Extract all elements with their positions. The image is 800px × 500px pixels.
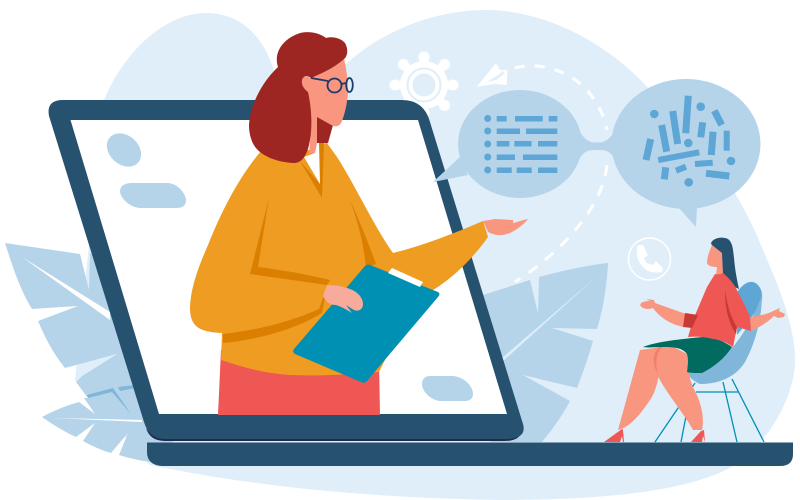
front leg [653, 345, 703, 430]
shoe: front [691, 430, 705, 442]
chair legs [655, 379, 764, 442]
leaf: left, behind laptop [5, 243, 175, 462]
character: teacher [190, 32, 528, 415]
shirt [688, 273, 751, 347]
skirt [218, 350, 380, 415]
speech bubble: scrambled [612, 79, 760, 227]
face [301, 55, 348, 153]
screen blob 1 [100, 127, 148, 173]
screen blob 3 [422, 376, 473, 401]
leaf: right, behind laptop [460, 263, 608, 442]
chair seat [687, 293, 762, 384]
rear leg [618, 348, 660, 430]
sweater [190, 143, 488, 375]
paper [388, 268, 423, 287]
sweater lower crease [223, 287, 327, 343]
character: seated woman on chair [604, 238, 785, 442]
sweater neckline [300, 143, 324, 198]
arm: left [640, 299, 686, 327]
screen display [70, 120, 507, 414]
icon: paper plane [477, 63, 507, 87]
speech bubble: list [433, 90, 614, 198]
list rows [484, 115, 557, 174]
icon: gear [390, 52, 458, 118]
scrambled dots [650, 102, 735, 187]
white collar [304, 143, 320, 184]
icon: phone [628, 238, 670, 280]
dashed flight path [515, 66, 607, 130]
skirt [643, 337, 732, 373]
scrambled bars [646, 96, 729, 179]
shoe: rear [604, 429, 624, 442]
hair behind neck [316, 115, 333, 144]
shirt fold [725, 290, 737, 334]
clipboard [293, 265, 440, 383]
laptop screen [49, 100, 524, 441]
screen blob 2 [120, 183, 186, 208]
chair back [737, 282, 762, 335]
hair [711, 238, 739, 289]
sweater arm crease [350, 200, 376, 268]
face and neck [707, 245, 723, 275]
hand on clipboard [323, 285, 363, 313]
laptop base [147, 442, 793, 466]
bubble connector [580, 132, 614, 158]
hair [249, 32, 347, 163]
hand: outstretched [483, 219, 528, 235]
sweater sleeve crease [250, 198, 330, 285]
leg crease [654, 347, 662, 374]
shirt cuff [683, 313, 698, 328]
glasses [311, 78, 353, 92]
arm: right [750, 308, 785, 331]
